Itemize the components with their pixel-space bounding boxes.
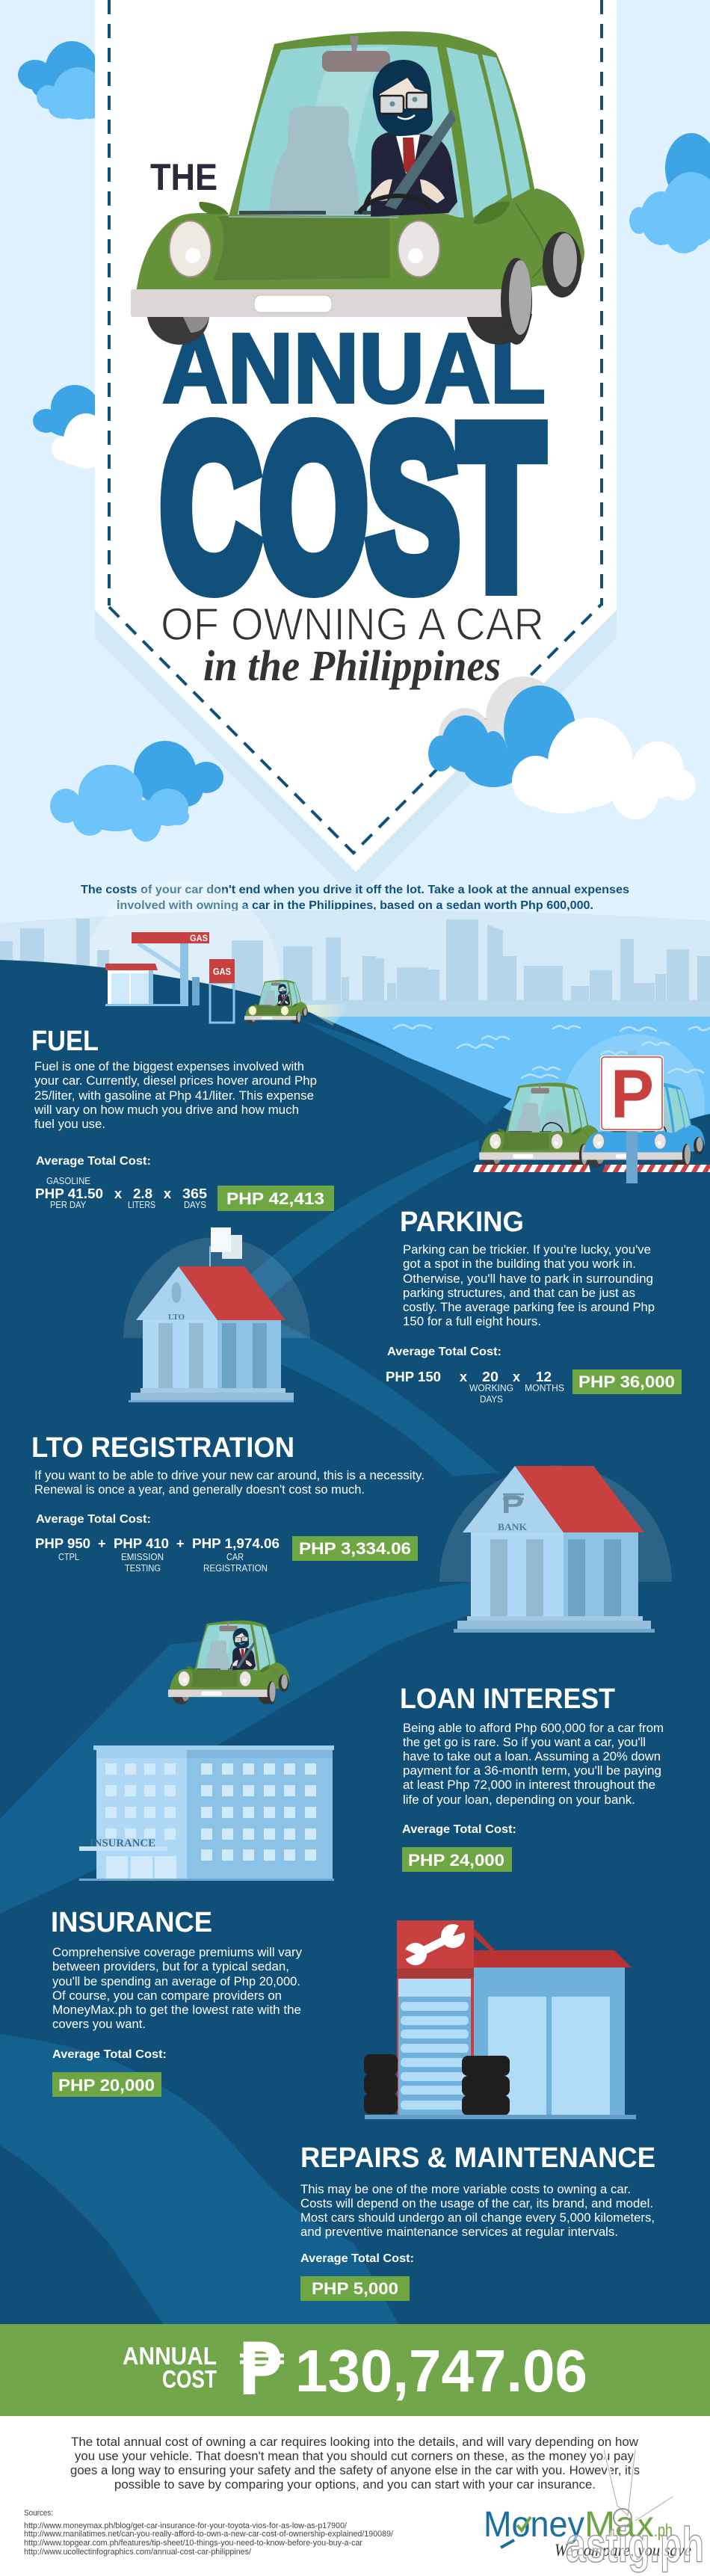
LTO formula: PHP 410: [114, 1536, 169, 1551]
loan body text: life of your loan, depending on your bank.: [403, 1793, 635, 1807]
MoneyMax logo: We compare, you save: [555, 2541, 691, 2560]
MoneyMax logo: Max: [584, 2505, 654, 2545]
LTO formula: CTPL: [58, 1552, 79, 1562]
fuel formula: x: [164, 1186, 171, 1201]
heading: LTO registration: LTO REGISTRATION: [31, 1432, 294, 1464]
fuel formula: 2.8: [133, 1186, 152, 1201]
sources: [24, 2509, 394, 2557]
bank building: BANK: [498, 1521, 528, 1532]
parking body text: parking structures, and that can be just as: [403, 1287, 635, 1300]
skyline backdrop: [0, 910, 710, 1024]
insurance building: INSURANCE: [90, 1837, 155, 1849]
section: loan interest: [400, 1683, 664, 1872]
LTO formula: +: [176, 1536, 185, 1551]
parking body text: costly. The average parking fee is around Php: [403, 1301, 655, 1314]
title: in the Philippines: in the Philippines: [203, 641, 501, 690]
loan total: PHP 24,000: [408, 1851, 504, 1870]
fuel formula: GASOLINE: [46, 1176, 90, 1186]
LTO formula: TESTING: [125, 1563, 161, 1574]
parking formula: x: [460, 1369, 467, 1384]
shop: [105, 964, 188, 1006]
annual cost label: COST: [162, 2365, 217, 2393]
cloud: lower right: [428, 685, 696, 819]
road sweeps: [0, 1021, 512, 2324]
fuel formula: DAYS: [184, 1200, 206, 1210]
bank building: P: [501, 1491, 524, 1519]
LTO body text: Renewal is once a year, and generally doesn't cost so much.: [34, 1483, 365, 1497]
intro text: [81, 884, 629, 912]
loan body text: the get go is rare. So if you want a car, you'll: [403, 1736, 646, 1749]
parking formula: x: [513, 1369, 520, 1384]
halo behind LTO: [123, 1237, 310, 1338]
insurance body text: covers you want.: [52, 2018, 146, 2031]
annual cost amount: 130,747.06: [295, 2338, 587, 2404]
fuel body text: 25/liter, with gasoline at Php 41/liter. This expense: [34, 1089, 314, 1103]
loan label: Average Total Cost:: [402, 1823, 516, 1836]
fuel body text: [34, 1060, 317, 1131]
parking total: PHP 36,000: [578, 1372, 675, 1391]
sources: Sources:: [24, 2509, 53, 2518]
parking sign: P: [611, 1056, 654, 1133]
MoneyMax logo: [484, 2505, 691, 2560]
heading: fuel: FUEL: [31, 1026, 99, 1057]
fuel body text: fuel you use.: [34, 1118, 105, 1131]
cloud: mid left: [33, 385, 108, 469]
MoneyMax logo: .ph: [654, 2521, 673, 2541]
parking barrier: [473, 1165, 710, 1172]
fuel body text: your car. Currently, diesel prices hover around Php: [34, 1074, 317, 1088]
repairs body text: Most cars should undergo an oil change every 5,000 kilometers,: [300, 2211, 655, 2225]
loan total: [402, 1847, 512, 1872]
section: fuel: [31, 1026, 334, 1211]
LTO body text: If you want to be able to drive your new car around, this is a necessity.: [34, 1469, 425, 1482]
parking formula: [386, 1346, 564, 1405]
insurance label: Average Total Cost:: [52, 2048, 167, 2061]
cloud: lower left: [50, 741, 223, 842]
canopy: GAS: [190, 933, 208, 943]
fuel body text: will vary on how much you drive and how much: [34, 1103, 299, 1117]
halo behind parking sign: [563, 1034, 705, 1176]
halo behind bank: [439, 1465, 672, 1582]
footer white panel: [0, 2416, 710, 2576]
fuel formula: Average Total Cost:: [36, 1155, 151, 1168]
parking sign: [600, 1051, 664, 1183]
illustration: green car with driver: [131, 31, 584, 345]
hill ground: [0, 960, 710, 2324]
LTO total: [292, 1536, 418, 1561]
cloud shadow on banner: [439, 677, 543, 771]
sources: http://www.moneymax.ph/blog/get-car-insurance-for-your-toyota-vios-for-as-low-as-p17900/: [24, 2521, 348, 2530]
parking body text: [403, 1243, 655, 1328]
fuel body text: Fuel is one of the biggest expenses involved with: [34, 1060, 304, 1073]
gas station: [105, 932, 235, 1023]
section: parking: [386, 1207, 682, 1405]
waves: [394, 1025, 710, 1078]
parking formula: 12: [536, 1369, 552, 1384]
section: LTO registration: [31, 1432, 425, 1574]
LTO formula: EMISSION: [121, 1552, 164, 1562]
cloud: right: [629, 133, 710, 253]
parking formula: WORKING: [469, 1383, 513, 1393]
banner dashed outline: [109, 0, 602, 606]
loan body text: [403, 1722, 664, 1807]
pump sign: [209, 959, 235, 1023]
parked blue car: [582, 1082, 705, 1167]
heading: insurance: INSURANCE: [51, 1907, 212, 1938]
insurance body text: Of course, you can compare providers on: [52, 1989, 282, 2003]
insurance body text: between providers, but for a typical sedan,: [52, 1960, 289, 1973]
intro text: The costs of your car don't end when you drive it off the lot. Take a look at the annual expenses: [81, 884, 629, 896]
title: THE: THE: [150, 156, 217, 198]
green car on road: [168, 1621, 290, 1704]
fuel total: PHP 42,413: [226, 1189, 324, 1208]
annual cost label: [123, 2342, 217, 2393]
parking formula: Average Total Cost:: [387, 1346, 501, 1358]
horizon band: [0, 1000, 710, 1017]
repairs body text: and preventive maintenance services at regular intervals.: [300, 2225, 618, 2239]
loan body text: Being able to afford Php 600,000 for a car from: [403, 1722, 664, 1735]
parked green car: [479, 1082, 602, 1167]
title banner: [95, 0, 617, 872]
title: ANNUAL: ANNUAL: [162, 313, 546, 423]
annual cost band: [0, 2324, 710, 2416]
sources: http://www.ucollectinfographics.com/annual-cost-car-philippines/: [24, 2548, 252, 2557]
LTO formula: [35, 1513, 280, 1574]
closing text: possible to save by comparing your options, and you can start with your car insurance.: [114, 2478, 596, 2492]
skyline buildings: [0, 919, 710, 1028]
sources: http://www.topgear.com.ph/features/tip-sheet/10-things-you-need-to-know-before-you-buy-a-car: [24, 2539, 362, 2548]
parking body text: Otherwise, you'll have to park in surrounding: [403, 1272, 653, 1286]
sea: [262, 1017, 710, 1196]
section: insurance: [51, 1907, 303, 2097]
LTO formula: +: [98, 1536, 106, 1551]
canopy: [132, 932, 209, 943]
closing text: you use your vehicle. That doesn't mean that you should cut corners on these, as the money you pay: [75, 2450, 635, 2463]
halo behind gas station: [82, 881, 280, 1078]
loan body text: at least Php 72,000 in interest throughout the: [403, 1778, 655, 1792]
insurance total: PHP 20,000: [58, 2076, 155, 2095]
LTO formula: CAR: [226, 1552, 244, 1562]
fuel formula: PHP 41.50: [35, 1186, 103, 1201]
icon: wrench: [399, 1920, 472, 1965]
LTO building: LTO: [168, 1313, 185, 1322]
LTO body text: [34, 1469, 425, 1497]
fuel formula: 365: [182, 1186, 207, 1201]
fuel formula: LITERS: [128, 1200, 155, 1210]
LTO formula: PHP 1,974.06: [192, 1536, 280, 1551]
LTO building: [129, 1227, 294, 1402]
bank building: [454, 1466, 655, 1633]
repairs total: PHP 5,000: [312, 2279, 398, 2298]
repair shop: [364, 1920, 636, 2119]
heading: parking: PARKING: [400, 1207, 524, 1238]
cloud: top left: [18, 41, 105, 120]
heading: loan interest: LOAN INTEREST: [400, 1683, 615, 1715]
closing text: goes a long way to ensuring your safety and the safety of anyone else in the car with you. However, it's: [70, 2464, 640, 2477]
small car beam: [299, 1003, 351, 1026]
parking formula: PHP 150: [386, 1369, 441, 1384]
LTO formula: REGISTRATION: [203, 1563, 268, 1574]
section: repairs and maintenance: [300, 2142, 655, 2301]
title: of owning a car: OF OWNING A CAR: [161, 599, 544, 650]
insurance body text: [52, 1946, 303, 2031]
insurance building: [79, 1745, 334, 1881]
parking body text: Parking can be trickier. If you're lucky, you've: [403, 1243, 651, 1257]
parking formula: DAYS: [480, 1394, 503, 1405]
loan body text: have to take out a loan. Assuming a 20% down: [403, 1750, 661, 1763]
intro text: involved with owning a car in the Philippines, based on a sedan worth Php 600,000.: [117, 899, 593, 912]
watermark: [566, 2450, 704, 2572]
fuel formula: x: [114, 1186, 122, 1201]
insurance body text: MoneyMax.ph to get the lowest rate with the: [52, 2003, 301, 2017]
insurance body text: you'll be spending an average of Php 20,000.: [52, 1975, 300, 1988]
fuel formula: [35, 1155, 207, 1210]
annual cost label: ANNUAL: [123, 2342, 217, 2370]
parking body text: got a spot in the building that you work in.: [403, 1257, 636, 1271]
repairs body text: Costs will depend on the usage of the car, its brand, and model.: [300, 2197, 653, 2210]
parking body text: 150 for a full eight hours.: [403, 1315, 541, 1328]
repairs body text: This may be one of the more variable costs to owning a car.: [300, 2183, 631, 2196]
parking total: [572, 1369, 682, 1394]
insurance total: [52, 2072, 161, 2097]
closing text: [70, 2435, 640, 2492]
banner shadow: [95, 610, 617, 899]
repairs body text: [300, 2183, 655, 2239]
LTO formula: Average Total Cost:: [36, 1513, 151, 1526]
repairs label: Average Total Cost:: [300, 2252, 414, 2265]
peso sign: ₱: [238, 2328, 284, 2412]
repairs total: [300, 2276, 410, 2301]
closing text: The total annual cost of owning a car requires looking into the details, and will vary depending on how: [71, 2435, 638, 2449]
insurance body text: Comprehensive coverage premiums will vary: [52, 1946, 303, 1959]
pump sign: GAS: [213, 966, 231, 977]
sources: http://www.manilatimes.net/can-you-really-afford-to-own-a-new-car-cost-of-ownership-explained/190089/: [24, 2530, 394, 2539]
parking formula: 20: [482, 1369, 498, 1384]
fuel formula: PER DAY: [50, 1200, 87, 1210]
parking formula: MONTHS: [525, 1383, 564, 1393]
LTO formula: PHP 950: [35, 1536, 90, 1551]
LTO total: PHP 3,334.06: [299, 1539, 411, 1558]
small car at gas station: [244, 980, 308, 1024]
fuel total: [217, 1186, 334, 1211]
loan body text: payment for a 36-month term, you'll be paying: [403, 1764, 661, 1778]
MoneyMax logo: Money: [484, 2505, 584, 2545]
heading: repairs and maintenance: REPAIRS & MAINTENANCE: [300, 2142, 655, 2174]
